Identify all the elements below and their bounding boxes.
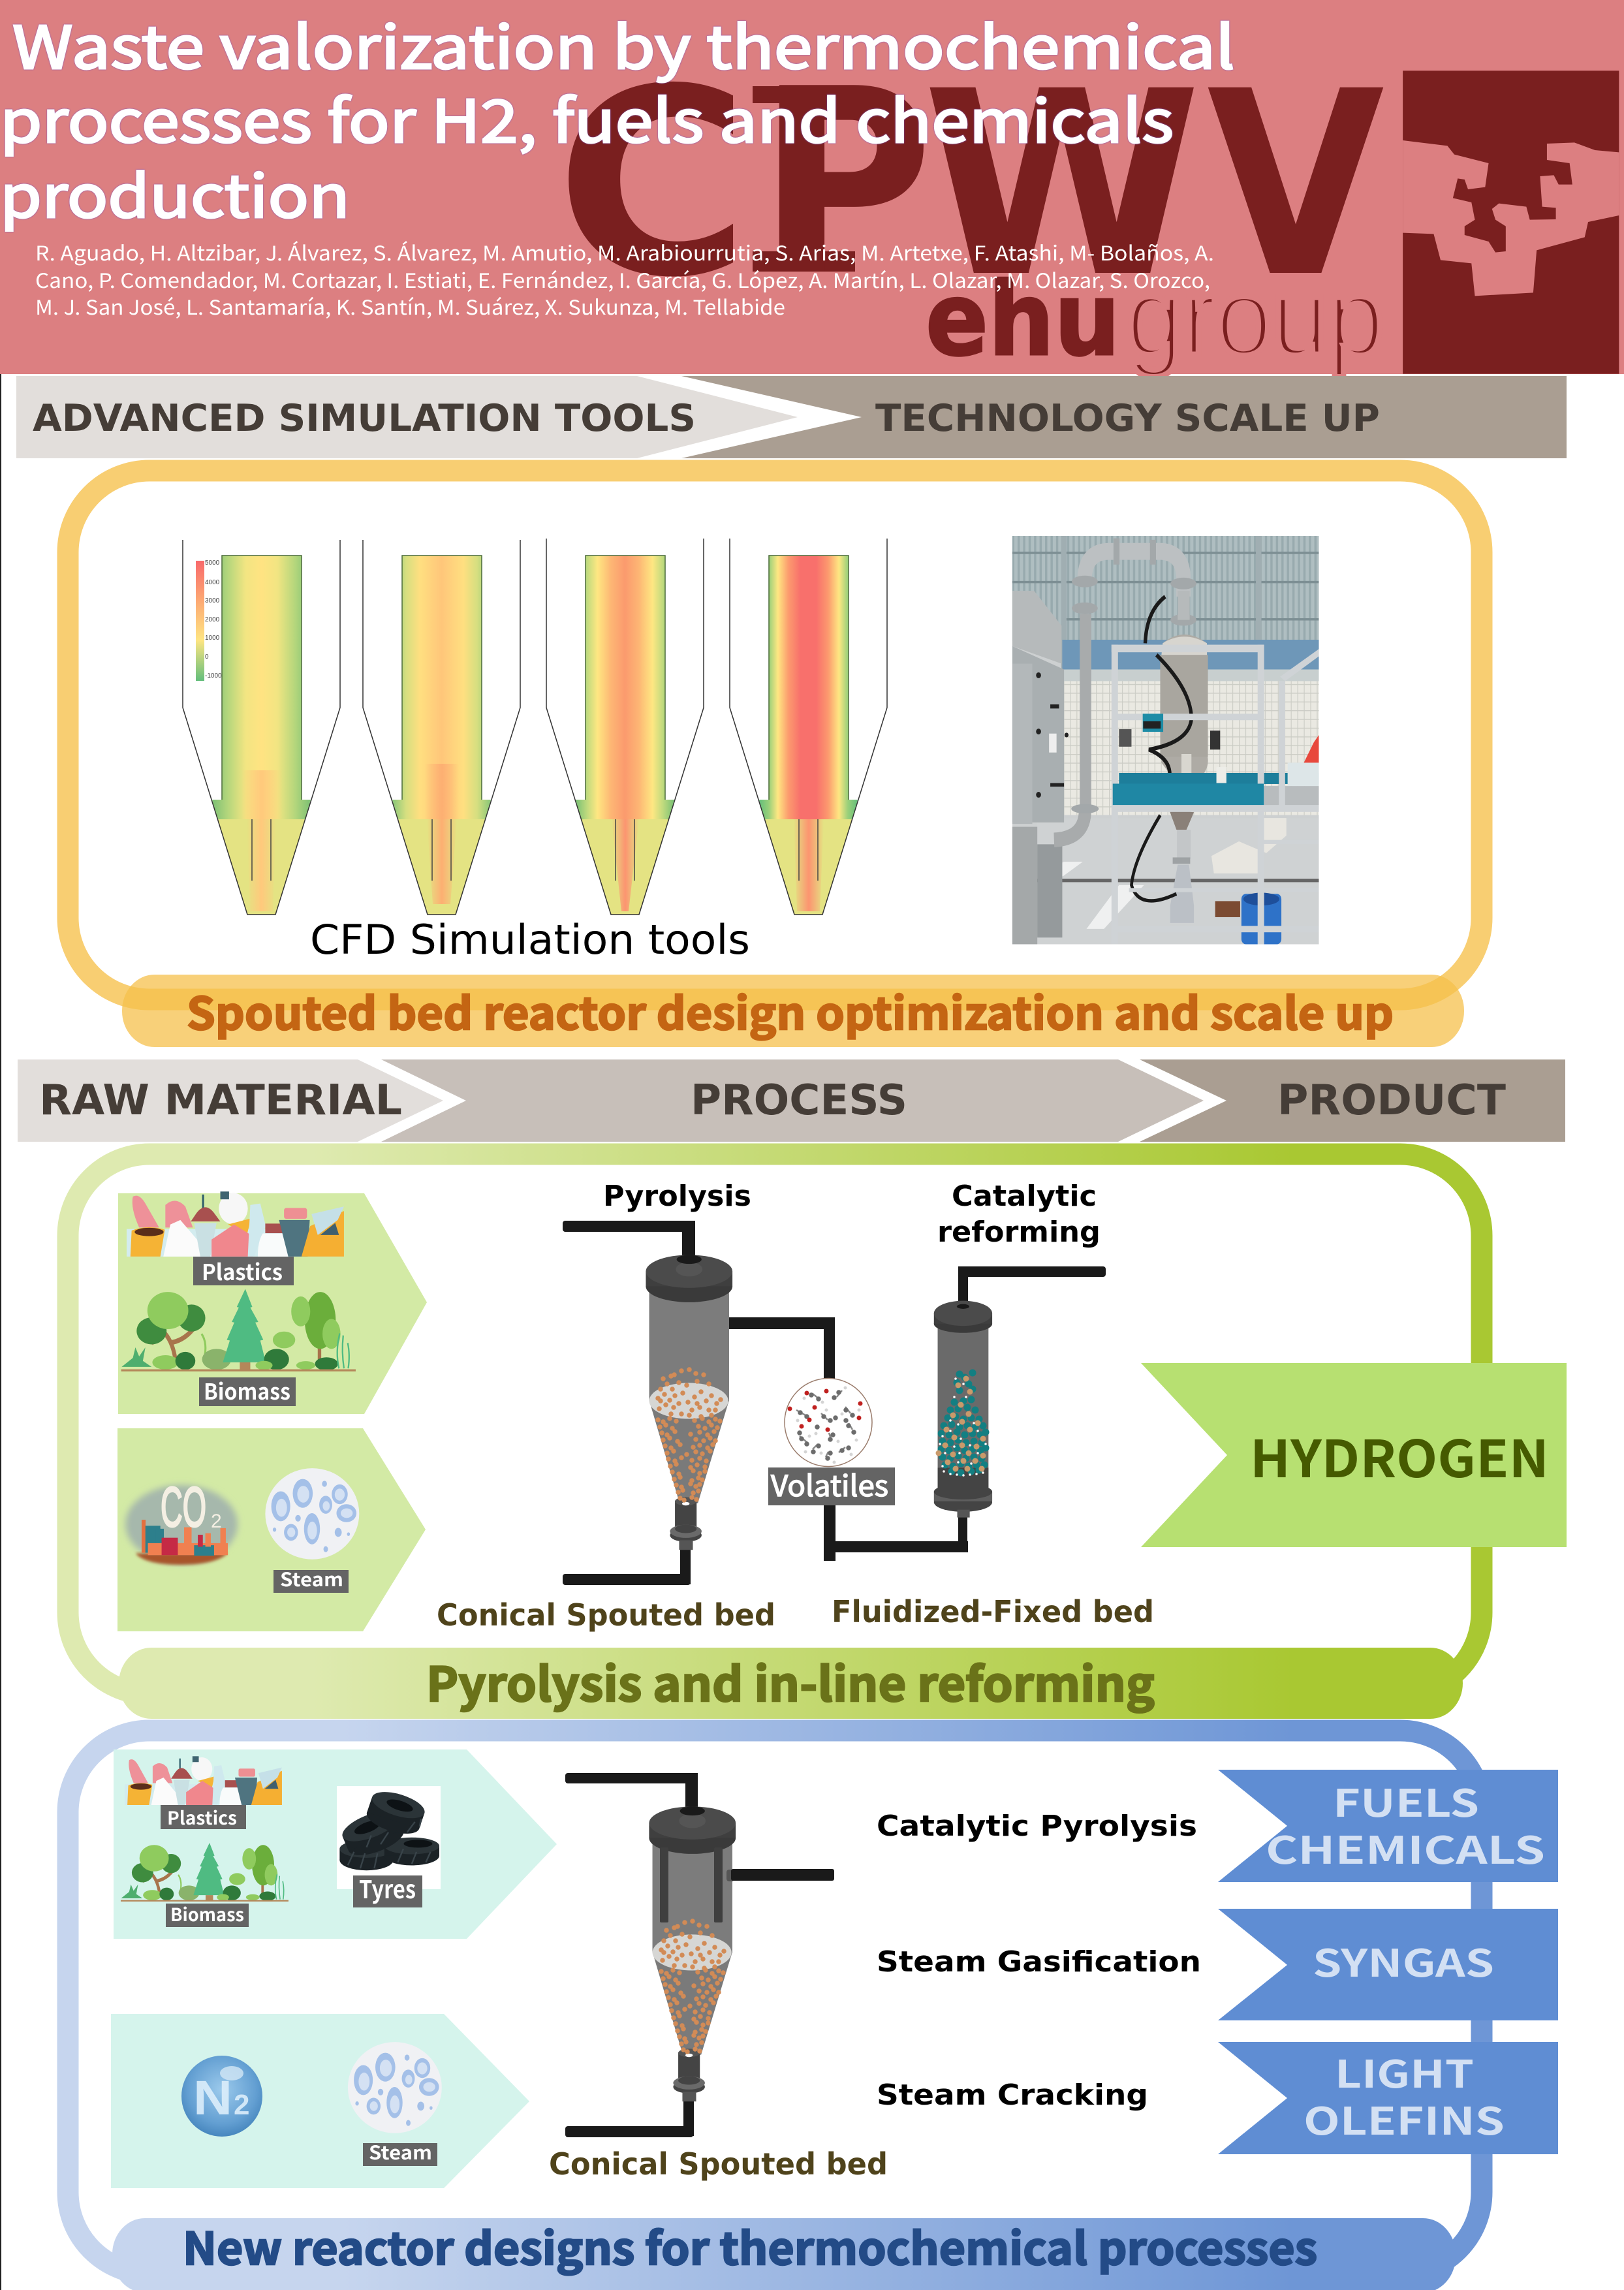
band: simulation tools to scale up: ADVANCED SIMULATION TOOLS (33, 397, 696, 440)
process labels (877, 1810, 1201, 2112)
product arrow: light olefins: LIGHT (1335, 2044, 1474, 2099)
feed arrow: CO2 and steam: CO (161, 1476, 206, 1539)
process labels: Catalytic Pyrolysis (877, 1810, 1197, 1843)
banner: new reactor designs (112, 2218, 1456, 2290)
banner text: New reactor designs for thermochemical processes (183, 2213, 1317, 2278)
label: catalytic reforming: Catalytic (952, 1180, 1097, 1213)
volatiles label: Volatiles (771, 1463, 888, 1505)
feed arrow: plastics and biomass: Biomass (204, 1374, 290, 1406)
band: simulation tools to scale up: TECHNOLOGY SCALE UP (875, 397, 1380, 440)
product arrow: fuels and chemicals: CHEMICALS (1266, 1820, 1545, 1875)
product arrow: syngas (1218, 1909, 1558, 2020)
CFD reactor 1 with colour scale: 4000 (205, 579, 220, 586)
panel: spouted bed design (68, 471, 1482, 1047)
conical spouted bed with draft tube (565, 1773, 834, 2137)
band: raw material, process, product: PROCESS (691, 1076, 907, 1125)
product arrow: light olefins: OLEFINS (1304, 2091, 1505, 2146)
band: raw material, process, product: RAW MATERIAL (39, 1076, 402, 1125)
title (0, 1, 1235, 234)
CFD reactor 2 (363, 540, 520, 915)
logo: university emblem (1403, 71, 1619, 374)
CFD reactor 1 with colour scale: 2000 (205, 616, 220, 623)
logo: CPWV ehugroup: V (1207, 37, 1386, 333)
CFD reactor 1 with colour scale: 3000 (205, 597, 220, 604)
band: raw material, process, product: PRODUCT (1277, 1076, 1506, 1125)
process labels: Steam Gasification (877, 1945, 1201, 1979)
title: processes for H2, fuels and chemicals (0, 74, 1174, 159)
logo: CPWV ehugroup: ehu (926, 260, 1120, 379)
photo: pilot plant (1012, 536, 1319, 944)
banner text: Pyrolysis and in-line reforming (426, 1646, 1155, 1715)
feed arrow: nitrogen and steam: 2 (234, 2089, 249, 2121)
authors: R. Aguado, H. Altzibar, J. Álvarez, S. Álvarez, M. Amutio, M. Arabiourrutia, S. Arias, M. Artetxe, F. Atashi, M- Bolaños, A. (35, 237, 1214, 266)
CFD caption: CFD Simulation tools (310, 916, 750, 964)
feed arrow: plastics, biomass, tyres: Tyres (359, 1870, 416, 1906)
band: raw material, process, product (18, 1059, 1565, 1142)
feed arrow: plastics and biomass (118, 1191, 427, 1414)
CFD reactor 1 with colour scale: -1000 (205, 672, 222, 680)
product arrow: hydrogen: HYDROGEN (1250, 1419, 1549, 1492)
volatiles molecules (785, 1379, 872, 1466)
product arrow: hydrogen (1141, 1363, 1567, 1547)
logo: CPWV ehugroup: P (757, 35, 933, 332)
band: simulation tools to scale up (16, 376, 1567, 458)
feed arrow: CO2 and steam: Steam (280, 1565, 343, 1592)
CFD reactor 1 with colour scale: 0 (205, 653, 209, 661)
CFD reactor 1 with colour scale (183, 540, 340, 915)
feed arrow: CO2 and steam: 2 (211, 1511, 222, 1532)
authors (35, 237, 1214, 321)
banner: pyrolysis and reforming (119, 1648, 1463, 1719)
title: Waste valorization by thermochemical (12, 1, 1235, 86)
authors: Cano, P. Comendador, M. Cortazar, I. Estiati, E. Fernández, I. García, G. López, A. Martín, L. Olazar, M. Olazar, S. Orozco, (35, 264, 1210, 294)
logo: CPWV ehugroup: group (1127, 257, 1384, 378)
CFD reactor 4 (730, 539, 887, 915)
label: conical spouted bed: Conical Spouted bed (437, 1597, 775, 1633)
banner: spouted bed design (122, 975, 1464, 1047)
page edge (0, 374, 1, 2290)
banner text: Spouted bed reactor design optimization and scale up (187, 978, 1394, 1043)
label: catalytic reforming (937, 1180, 1101, 1249)
feed arrow: nitrogen and steam: N (193, 2071, 232, 2125)
feed arrow: plastics, biomass, tyres: Biomass (170, 1901, 244, 1927)
process pipes (563, 1221, 1106, 1585)
CFD reactor 1 with colour scale: 1000 (205, 635, 220, 642)
label: catalytic reforming: reforming (937, 1216, 1101, 1249)
product arrow: fuels and chemicals: FUELS (1333, 1773, 1479, 1828)
panel: pyrolysis and reforming (68, 1154, 1567, 1719)
process labels: Steam Cracking (877, 2078, 1148, 2112)
CFD reactor 1 with colour scale: 5000 (205, 559, 220, 567)
product arrow: light olefins (1218, 2042, 1558, 2154)
conical spouted bed reactor (646, 1255, 732, 1550)
feed arrow: CO2 and steam (117, 1428, 426, 1631)
feed arrow: plastics and biomass: Plastics (202, 1255, 283, 1287)
title: production (0, 149, 350, 234)
fluidized fixed bed reactor (934, 1301, 992, 1518)
feed arrow: nitrogen and steam (111, 2014, 529, 2188)
logo: CPWV ehugroup (555, 34, 1386, 379)
feed arrow: plastics, biomass, tyres: Plastics (167, 1804, 237, 1830)
authors: M. J. San José, L. Santamaría, K. Santín, M. Suárez, X. Sukunza, M. Tellabide (35, 291, 785, 321)
CFD reactor 3 (546, 539, 704, 915)
label: pyrolysis: Pyrolysis (603, 1180, 751, 1213)
product arrow: syngas: SYNGAS (1313, 1933, 1494, 1988)
header panel (0, 0, 1624, 379)
logo: CPWV ehugroup: C (555, 34, 750, 334)
logo: CPWV ehugroup: W (922, 37, 1202, 333)
label: fluidized fixed bed: Fluidized-Fixed bed (832, 1594, 1154, 1629)
feed arrow: nitrogen and steam: Steam (369, 2138, 432, 2165)
product arrow: fuels and chemicals (1218, 1770, 1558, 1882)
feed arrow: plastics, biomass, tyres (114, 1749, 557, 1939)
panel: new reactor designs (68, 1731, 1558, 2290)
label: conical spouted bed: Conical Spouted bed (549, 2146, 888, 2182)
